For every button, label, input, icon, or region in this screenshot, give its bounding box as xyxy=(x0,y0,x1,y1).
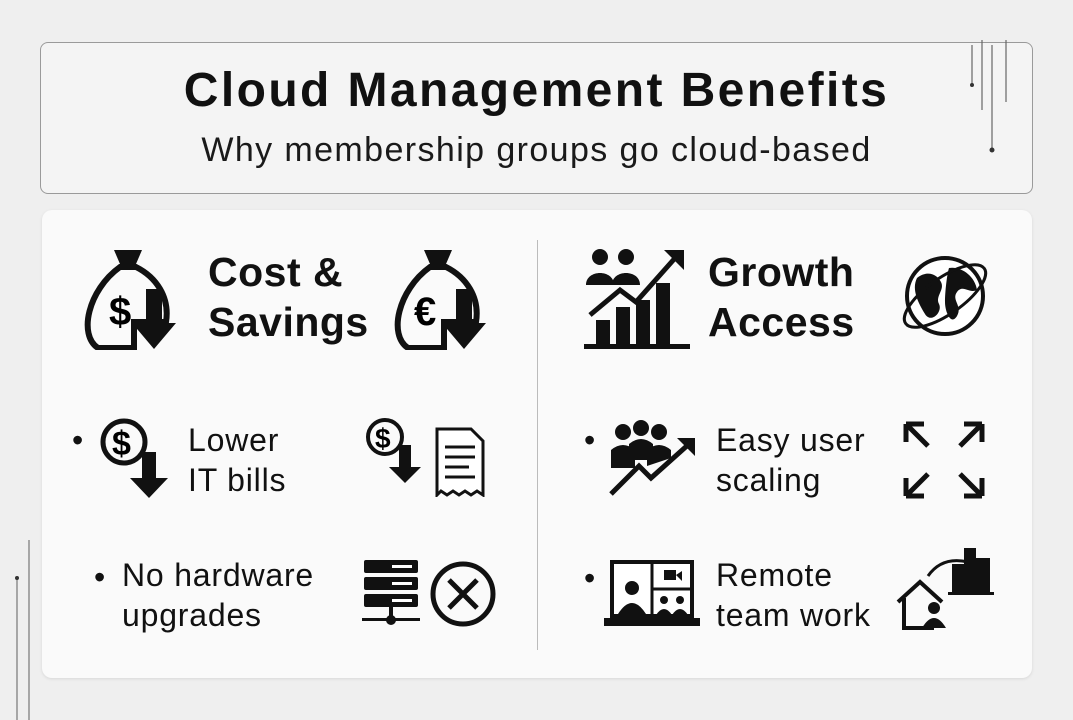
icon: money bag euro down xyxy=(394,250,486,350)
bullet: Lower IT bills: Lower xyxy=(188,422,279,458)
icon: money bag dollar down xyxy=(84,250,176,350)
bullet: Remote team work: Remote xyxy=(716,557,833,593)
bullet: No hardware upgrades: No hardware xyxy=(122,557,314,593)
icon: server xyxy=(362,560,420,625)
subtitle: Why membership groups go cloud-based xyxy=(201,131,872,169)
icon: money bag euro down: € xyxy=(414,290,436,334)
heading: Growth Access: Growth xyxy=(708,249,854,295)
icon: laptop video call xyxy=(604,560,700,626)
bullet: Remote team work: • xyxy=(584,560,596,596)
icon: globe xyxy=(902,256,988,336)
bullet: Easy user scaling: scaling xyxy=(716,462,821,498)
bullet: Lower IT bills xyxy=(72,418,484,498)
bullet: Remote team work: team work xyxy=(716,597,871,633)
icon: circle X xyxy=(430,562,496,626)
bullet: Remote team work xyxy=(584,548,994,633)
bullet: No hardware upgrades: • xyxy=(94,559,106,595)
icon: coin down: $ xyxy=(112,425,131,463)
bullet: No hardware upgrades: upgrades xyxy=(122,597,262,633)
icon: coin and receipt: $ xyxy=(375,423,391,454)
heading: Cost & Savings xyxy=(208,249,369,345)
icon: coin down xyxy=(100,418,168,498)
heading: Cost & Savings: Cost & xyxy=(208,249,343,295)
heading: Growth Access xyxy=(708,249,855,345)
heading: Cost & Savings: Savings xyxy=(208,299,369,345)
main panel xyxy=(42,210,1032,678)
bullet: Easy user scaling xyxy=(584,420,984,498)
bullet: No hardware upgrades xyxy=(94,557,496,633)
icon: expand arrows xyxy=(904,422,984,498)
heading: Growth Access: Access xyxy=(708,299,855,345)
icon: money bag dollar down: $ xyxy=(109,290,131,334)
bullet: Easy user scaling: • xyxy=(584,422,596,458)
icon: growth chart people xyxy=(584,249,690,349)
bullet: Lower IT bills: • xyxy=(72,422,84,458)
title: Cloud Management Benefits xyxy=(184,64,889,117)
header box xyxy=(40,42,1033,194)
bullet: Lower IT bills: IT bills xyxy=(188,462,286,498)
icon: home and city xyxy=(896,548,994,630)
icon: coin and receipt xyxy=(366,418,484,497)
bullet: Easy user scaling: Easy user xyxy=(716,422,865,458)
icon: people growth xyxy=(609,420,695,496)
